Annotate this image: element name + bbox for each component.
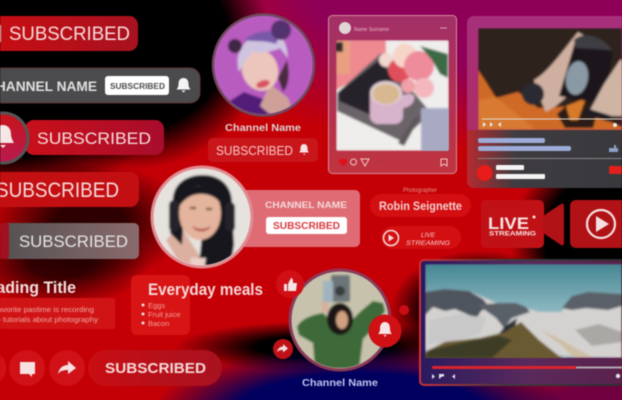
icon: play button (570, 200, 622, 248)
progress bar (432, 366, 576, 369)
list card: everyday meals: Bacon (148, 319, 169, 328)
post action icons (339, 159, 447, 166)
channel name bar (0, 68, 200, 103)
channel panel text: CHANNEL NAME (265, 200, 347, 211)
description bars (478, 138, 545, 143)
label: channel name: Channel Name (225, 122, 301, 134)
button: subscribed top: SUBSCRIBED (9, 24, 130, 45)
button: subscribed large: SUBSCRIBED (0, 179, 119, 202)
video still: hands with coffee cup (478, 28, 622, 130)
button: subscribed with bell (0, 113, 164, 163)
pill: robin seignette: Robin Seignette (379, 199, 462, 213)
button: subscribed gray: SUBSCRIBED (19, 232, 128, 251)
pill: live streaming (381, 226, 461, 249)
list card: everyday meals: Fruit juice (148, 310, 181, 319)
heading block (0, 278, 115, 329)
avatar: woman in green sweater (290, 270, 390, 370)
icon: bell (0, 125, 14, 148)
icon: partial circle button (0, 350, 6, 386)
button: subscribed bottom (88, 350, 222, 386)
button: subscribed bottom: SUBSCRIBED (105, 360, 206, 377)
subscribe button (609, 166, 622, 174)
list card: everyday meals: Everyday meals (148, 281, 263, 299)
avatar: woman with headphones (150, 166, 360, 270)
icon: bell circle (368, 314, 402, 348)
icon: comment button (9, 350, 45, 386)
decorative dot (399, 305, 409, 315)
avatar (339, 22, 351, 34)
video player bottom right (420, 260, 622, 385)
icon: live streaming camera: LIVE (488, 214, 529, 233)
icon: thumbs up (276, 270, 304, 298)
list card: everyday meals: Eggs (148, 301, 165, 310)
video still: snowy mountains (425, 264, 622, 362)
post photo (336, 40, 450, 152)
button: subscribed gray (0, 223, 139, 259)
avatar: purple hair woman (210, 10, 320, 120)
button: subscribed top (0, 16, 138, 51)
icon: share small (273, 339, 293, 359)
icon: live streaming camera (481, 200, 564, 248)
label: channel name bottom: Channel Name (302, 377, 378, 389)
list card: everyday meals (131, 275, 263, 335)
pill: robin seignette (370, 194, 471, 217)
player controls (432, 374, 455, 379)
label: photographer: Photographer (403, 188, 437, 194)
button: subscribed with small bell (208, 138, 318, 162)
video player top right (467, 16, 622, 188)
button: subscribed large (0, 172, 139, 207)
name: Name Surname (354, 27, 389, 33)
player controls (483, 122, 501, 127)
channel name bar: SUBSCRIBED (110, 82, 165, 91)
icon: share button (49, 350, 85, 386)
pill: live streaming: STREAMING (406, 240, 450, 247)
button: subscribed with small bell: SUBSCRIBED (216, 144, 293, 158)
pill: live streaming: LIVE (421, 232, 436, 239)
channel avatar dot (476, 165, 492, 181)
icon: bell (176, 78, 190, 92)
social post card (328, 16, 456, 174)
avatar: woman with headphones: SUBSCRIBED (273, 221, 340, 232)
icon: live streaming camera: STREAMING (489, 230, 536, 238)
button: subscribed with bell: SUBSCRIBED (37, 129, 151, 148)
